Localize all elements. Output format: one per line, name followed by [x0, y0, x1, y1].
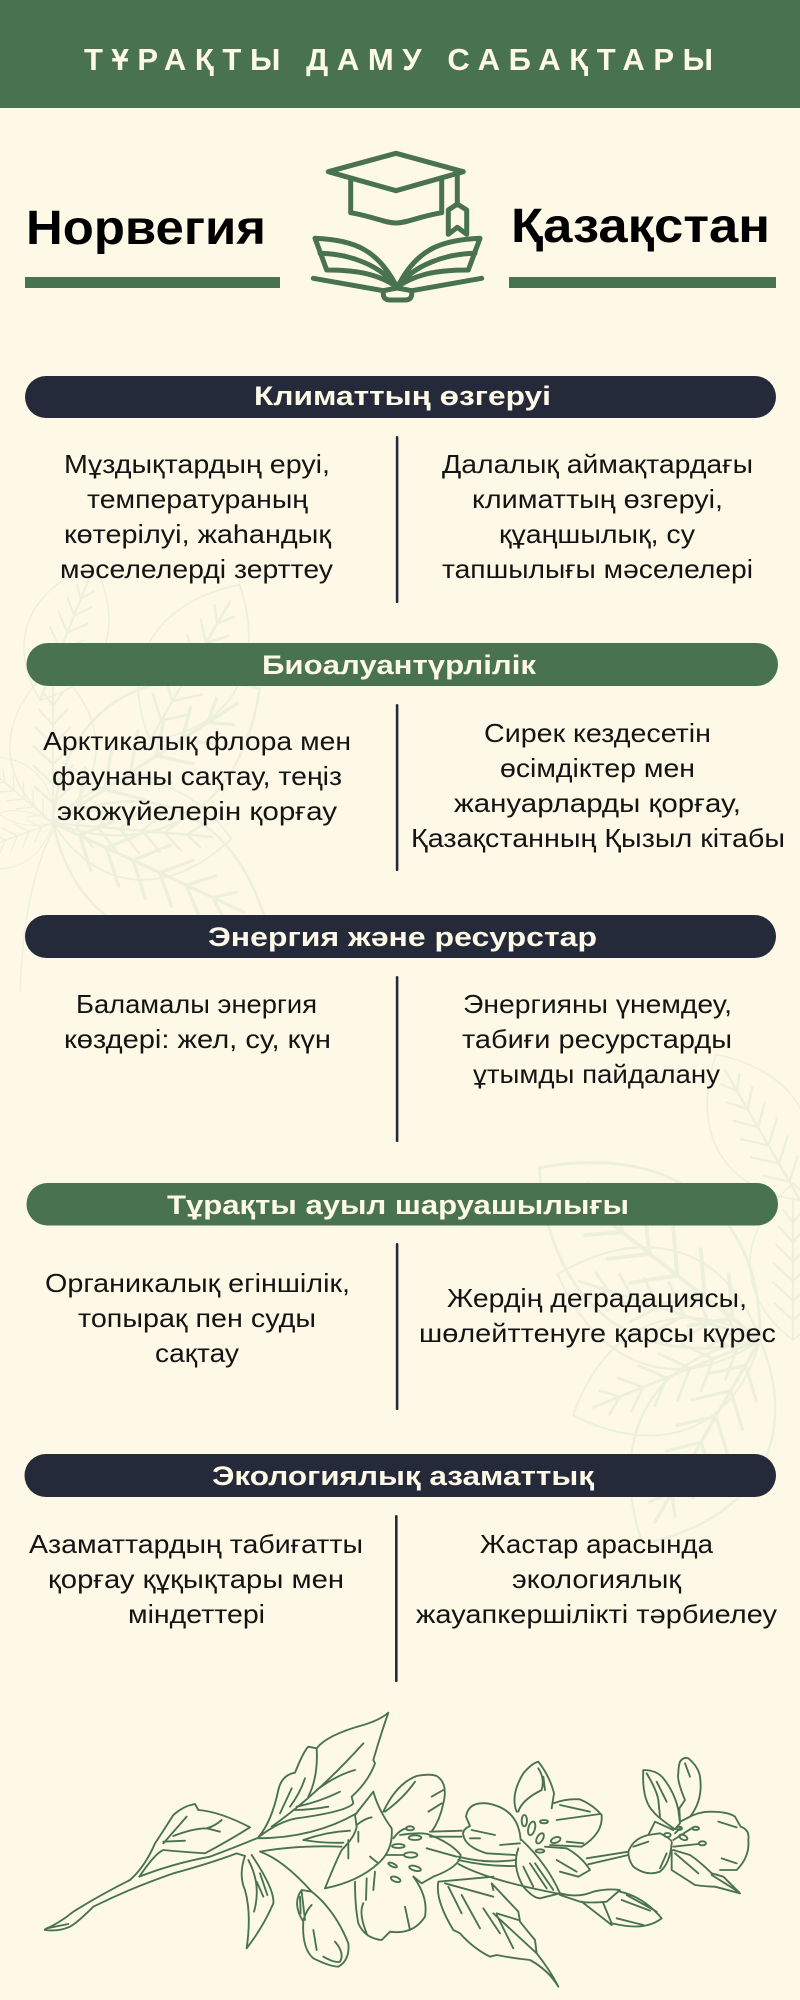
section 5 text: Kazakhstan: экологиялық: [512, 1564, 682, 1594]
section 3 text: Kazakhstan: [462, 989, 732, 1089]
section 2 text: Kazakhstan: жануарларды қорғау,: [454, 788, 741, 818]
section 5 header pill: ecological citizenship: Экологиялық азаматтық: [212, 1461, 595, 1491]
section 5 divider: [395, 1515, 398, 1682]
section 1 text: Norway: [60, 449, 333, 584]
section 2 text: Norway: Арктикалық флора мен: [43, 726, 351, 756]
section 1 header pill: climate change: [25, 376, 776, 418]
section 1 text: Kazakhstan: құаңшылық, су: [499, 519, 695, 549]
section 5 header pill: ecological citizenship: [24, 1454, 776, 1497]
section 5 text: Kazakhstan: жауапкершілікті тәрбиелеу: [416, 1599, 777, 1629]
header banner: [0, 0, 800, 108]
section 1 text: Norway: температураның: [87, 484, 309, 514]
section 1 text: Norway: мәселелерді зерттеу: [60, 554, 333, 584]
section 3 divider: [396, 976, 398, 1142]
section 1 divider: [396, 436, 398, 603]
section 3 text: Kazakhstan: ұтымды пайдалану: [473, 1059, 720, 1089]
section 2 text: Norway: [43, 726, 351, 826]
section 4 header pill: sustainable agriculture: [26, 1183, 778, 1226]
section 2 divider: [396, 704, 398, 871]
section 1 header pill: climate change: Климаттың өзгеруі: [254, 381, 551, 411]
section 5 text: Norway: қорғау құқықтары мен: [48, 1564, 344, 1594]
section 4 text: Norway: [45, 1268, 350, 1368]
branch right part: flowers, leaf, bud: [383, 1758, 749, 1987]
section 1 text: Norway: көтерілуі, жаһандық: [64, 519, 332, 549]
section 4 text: Kazakhstan: [419, 1283, 776, 1348]
section 2 text: Norway: фаунаны сақтау, теңіз: [52, 761, 342, 791]
section 3 text: Kazakhstan: Энергияны үнемдеу,: [463, 989, 732, 1019]
section 4 header pill: sustainable agriculture: Тұрақты ауыл шаруашылығы: [167, 1190, 629, 1220]
icon: graduation cap on open book: [313, 153, 482, 300]
section 2 header pill: biodiversity: [26, 643, 778, 686]
section 4 text: Norway: сақтау: [155, 1338, 239, 1368]
column heading: Norway: [25, 202, 280, 288]
section 2 text: Kazakhstan: Қазақстанның Қызыл кітабы: [411, 823, 785, 853]
section 5 text: Norway: Азаматтардың табиғатты: [29, 1529, 363, 1559]
section 2 text: Kazakhstan: Сирек кездесетін: [484, 718, 711, 748]
section 2 header pill: biodiversity: Биоалуантүрлілік: [262, 650, 537, 680]
background foliage: right: [492, 1031, 800, 1576]
section 1 text: Kazakhstan: [442, 449, 753, 584]
section 5 text: Norway: [29, 1529, 363, 1629]
section 1 text: Norway: Мұздықтардың еруі,: [64, 449, 330, 479]
section 5 text: Kazakhstan: [416, 1529, 777, 1629]
column heading: Kazakhstan: [509, 200, 776, 288]
section 5 text: Kazakhstan: Жастар арасында: [480, 1529, 714, 1559]
section 5 text: Norway: міндеттері: [128, 1599, 265, 1629]
section 2 text: Kazakhstan: өсімдіктер мен: [500, 753, 695, 783]
section 3 text: Norway: [64, 989, 331, 1054]
section 3 header pill: energy and resources: Энергия және ресурстар: [208, 922, 597, 952]
section 4 text: Norway: топырақ пен суды: [78, 1303, 316, 1333]
illustration: flowering branch: [45, 1713, 749, 1987]
section 3 text: Kazakhstan: табиғи ресурстарды: [462, 1024, 732, 1054]
title: ТҰРАҚТЫ ДАМУ САБАҚТАРЫ: [84, 42, 713, 77]
column heading: Norway: Норвегия: [26, 202, 266, 255]
section 4 divider: [396, 1243, 398, 1410]
section 4 text: Kazakhstan: шөлейттенуге қарсы күрес: [419, 1318, 776, 1348]
section 3 text: Norway: Баламалы энергия: [76, 989, 317, 1019]
section 1 text: Kazakhstan: тапшылығы мәселелері: [442, 554, 753, 584]
section 4 text: Norway: Органикалық егіншілік,: [45, 1268, 350, 1298]
section 4 text: Kazakhstan: Жердің деградациясы,: [447, 1283, 747, 1313]
section 3 text: Norway: көздері: жел, су, күн: [64, 1024, 331, 1054]
column heading: Kazakhstan: Қазақстан: [511, 200, 770, 253]
section 2 text: Norway: экожүйелерін қорғау: [57, 796, 337, 826]
section 3 header pill: energy and resources: [25, 915, 776, 958]
section 1 text: Kazakhstan: климаттың өзгеруі,: [472, 484, 723, 514]
section 2 text: Kazakhstan: [411, 718, 785, 853]
background foliage: left: [0, 550, 296, 992]
section 1 text: Kazakhstan: Далалық аймақтардағы: [442, 449, 753, 479]
branch left part: stem, leaves, bud, first flower: [45, 1713, 392, 1967]
